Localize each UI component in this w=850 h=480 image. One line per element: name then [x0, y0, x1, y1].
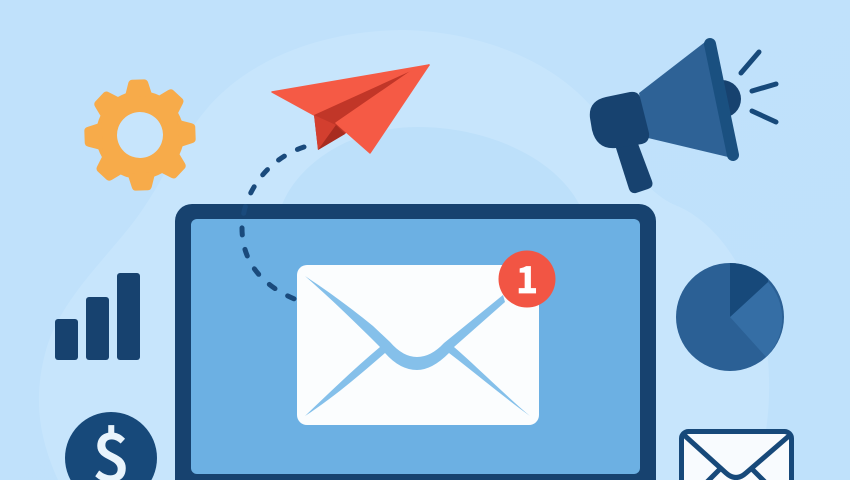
megaphone horn [639, 42, 728, 157]
notification badge [498, 250, 556, 308]
background blob: inner [280, 127, 582, 210]
icon: dollar coin [65, 405, 157, 480]
main envelope [297, 265, 539, 425]
megaphone rim [710, 44, 733, 155]
icon: bar chart [55, 273, 140, 360]
icon: megaphone [590, 42, 776, 193]
laptop [175, 204, 656, 480]
megaphone handle [615, 141, 652, 193]
icon: gear [83, 78, 197, 192]
icon: pie chart [676, 263, 784, 371]
megaphone grip [590, 92, 649, 148]
envelope fold lines [305, 276, 530, 416]
icon: paper plane [272, 65, 429, 153]
laptop screen [191, 219, 640, 474]
laptop frame [175, 204, 656, 480]
sound lines [741, 52, 776, 122]
megaphone back cap [703, 80, 741, 118]
dashed flight path [242, 147, 304, 300]
icon: small envelope [682, 432, 792, 480]
notification badge: 1 [516, 250, 538, 304]
